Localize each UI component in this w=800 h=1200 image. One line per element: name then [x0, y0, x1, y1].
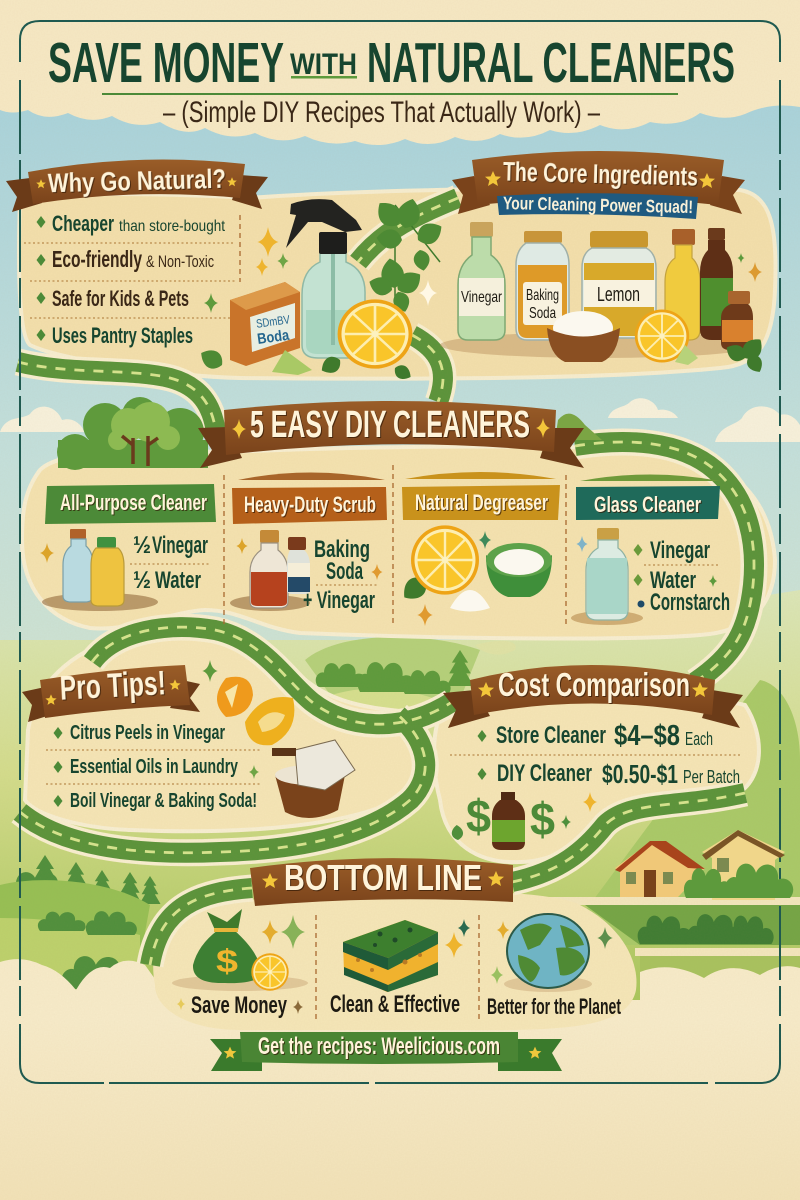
footer ribbon: [210, 1032, 562, 1071]
icon: lemon: [398, 572, 432, 605]
item: clean and effective: Clean & Effective: [330, 991, 460, 1018]
item: clean and effective: [330, 919, 470, 1018]
icon: bottles: [230, 530, 310, 611]
card: all-purpose cleaner: [40, 484, 216, 611]
banner: why go natural: [6, 160, 268, 212]
list: pro tips: Essential Oils in Laundry: [70, 756, 239, 778]
sand panel: cost comparison: [434, 696, 759, 862]
sand panel: bottom line: [153, 891, 637, 1030]
icon: money bag: $: [216, 943, 238, 979]
list: cost comparison: Per Batch: [683, 767, 740, 787]
icon: leaves: [723, 334, 767, 376]
ingredients: Vinegar: [650, 537, 710, 564]
icon: soda box: Boda: [256, 327, 291, 348]
blue ribbon: Your Cleaning Power Squad!: [503, 193, 693, 217]
right bush: [555, 414, 602, 440]
banner: bottom line: BOTTOM LINE: [284, 857, 482, 898]
subtitle: – (Simple DIY Recipes That Actually Work) –: [163, 96, 600, 129]
icon: small amber bottle: [721, 291, 753, 350]
header: Natural Degreaser: [415, 490, 548, 515]
ingredients: Water: [650, 567, 696, 594]
ingredients: ½: [133, 567, 151, 594]
icon: bucket: [275, 775, 345, 818]
card: natural degreaser: [398, 472, 560, 626]
header: [402, 485, 560, 520]
sky band: [0, 105, 800, 700]
icon: spray bottle: [286, 199, 365, 358]
icon: vinegar bottle: [458, 222, 505, 340]
header: Glass Cleaner: [594, 492, 701, 517]
banner: core ingredients: The Core Ingredients: [503, 156, 698, 192]
list: why go natural: than store-bought: [119, 218, 225, 235]
ingredients: + Vinegar: [303, 587, 375, 614]
cloud-edged title parchment: [0, 0, 800, 145]
item: save money: Save Money: [191, 992, 287, 1019]
land background: [0, 590, 800, 1000]
icon: powder pile: [450, 590, 490, 612]
illustration: dollars and bottle: [451, 790, 597, 850]
ingredients: Soda: [326, 558, 363, 585]
list: why go natural: Uses Pantry Staples: [52, 323, 193, 348]
ingredients: Water: [155, 567, 201, 594]
banner: cost comparison: [443, 665, 743, 728]
icon: bowl of soda: [547, 311, 620, 362]
dirt: [440, 332, 760, 358]
icon: oil bottle: [665, 229, 700, 340]
ingredients: Baking: [314, 536, 370, 563]
list: why go natural: Cheaper: [52, 211, 114, 236]
footer ribbon: Get the recipes: Weelicious.com: [258, 1033, 500, 1060]
ingredients: [634, 537, 730, 616]
illustration: core ingredients: [440, 222, 767, 376]
illustration: houses: [615, 830, 793, 900]
icon: sparkles: [258, 227, 278, 257]
ingredients: Cornstarch: [650, 589, 730, 616]
banner: why go natural: Why Go Natural?: [48, 164, 226, 198]
ingredients: [303, 536, 378, 614]
icon: globe: [504, 914, 592, 992]
icon: bottle: [571, 528, 643, 625]
list: pro tips: Boil Vinegar & Baking Soda!: [70, 790, 257, 812]
ingredients: ½: [133, 532, 151, 559]
left hills and trees: [0, 855, 160, 990]
item: better for the planet: Better for the Planet: [487, 994, 621, 1019]
card: glass cleaner: [571, 474, 730, 625]
list: why go natural: Eco-friendly: [52, 246, 142, 272]
list: why go natural: Safe for Kids & Pets: [52, 286, 189, 311]
list: cost comparison: $0.50-$1: [602, 759, 678, 789]
ingredients: Vinegar: [152, 532, 208, 559]
icon: baking soda jar: [516, 231, 569, 340]
list: cost comparison: Each: [685, 729, 713, 749]
banner: core ingredients: [452, 151, 745, 219]
sand panel: middle: [22, 446, 775, 639]
list: why go natural: [24, 211, 240, 348]
left trees: [57, 397, 208, 470]
icon: vinegar bottle: Vinegar: [461, 289, 503, 306]
banner: pro tips: [22, 664, 200, 722]
header: All-Purpose Cleaner: [60, 490, 207, 515]
list: cost comparison: DIY Cleaner: [497, 760, 592, 787]
right hills with bushes: [520, 680, 800, 985]
header: Heavy-Duty Scrub: [244, 492, 376, 517]
icon: lemon: [338, 299, 412, 369]
sand panel: top: [19, 188, 776, 379]
list: cost comparison: Store Cleaner: [496, 722, 606, 749]
banner: 5 easy diy cleaners: 5 EASY DIY CLEANERS: [250, 404, 530, 446]
title: [48, 31, 735, 95]
sand panel: pro tips: [25, 633, 424, 831]
icon: lemon half: [635, 309, 689, 363]
icon: lemon jar: Lemon: [597, 284, 640, 306]
list: why go natural: & Non-Toxic: [146, 252, 214, 271]
list: cost comparison: $4–$8: [614, 720, 680, 752]
icon: baking soda jar: Soda: [529, 305, 556, 322]
list: cost comparison: [450, 720, 742, 789]
list: pro tips: [46, 722, 262, 812]
icon: brown bottle: [700, 228, 733, 340]
icon: baking soda jar: Baking: [526, 287, 559, 304]
card: heavy-duty scrub: [230, 472, 387, 614]
bottom parchment clouds: [0, 959, 800, 1200]
icon: citrus peels: [217, 677, 253, 717]
icon: cucumber: [272, 350, 312, 375]
item: better for the planet: [487, 914, 621, 1019]
icon: soda box: SDmBV: [255, 312, 291, 331]
icon: herbs: [366, 196, 446, 314]
mid-scene hills: [305, 637, 516, 725]
icon: green bowl: [486, 543, 552, 597]
banner: bottom line: [250, 857, 513, 906]
illustration: citrus peels and wooden bucket: [202, 660, 355, 818]
illustration: dollars and bottle: $: [530, 793, 555, 845]
banner: pro tips: Pro Tips!: [59, 664, 167, 708]
banner: cost comparison: Cost Comparison: [498, 666, 690, 703]
distant clouds: [0, 398, 800, 442]
icon: bottles: [42, 529, 158, 611]
list: pro tips: Citrus Peels in Vinegar: [70, 722, 225, 744]
winding road: [18, 198, 754, 965]
header: [45, 484, 216, 524]
icon: soda box: [230, 282, 300, 366]
illustration: spray bottle, soda box, lemon, herbs: [197, 196, 446, 383]
header: [232, 487, 387, 524]
icon: sponge: [343, 920, 438, 992]
illustration: dollars and bottle: $: [466, 790, 491, 842]
ingredients: [130, 532, 210, 594]
title: SAVE MONEY: [48, 31, 284, 95]
icon: lemon jar: [582, 231, 656, 338]
title: WITH: [290, 48, 357, 81]
banner: 5 easy diy cleaners: [198, 401, 584, 468]
item: save money: [172, 909, 308, 1019]
header: [576, 486, 720, 520]
